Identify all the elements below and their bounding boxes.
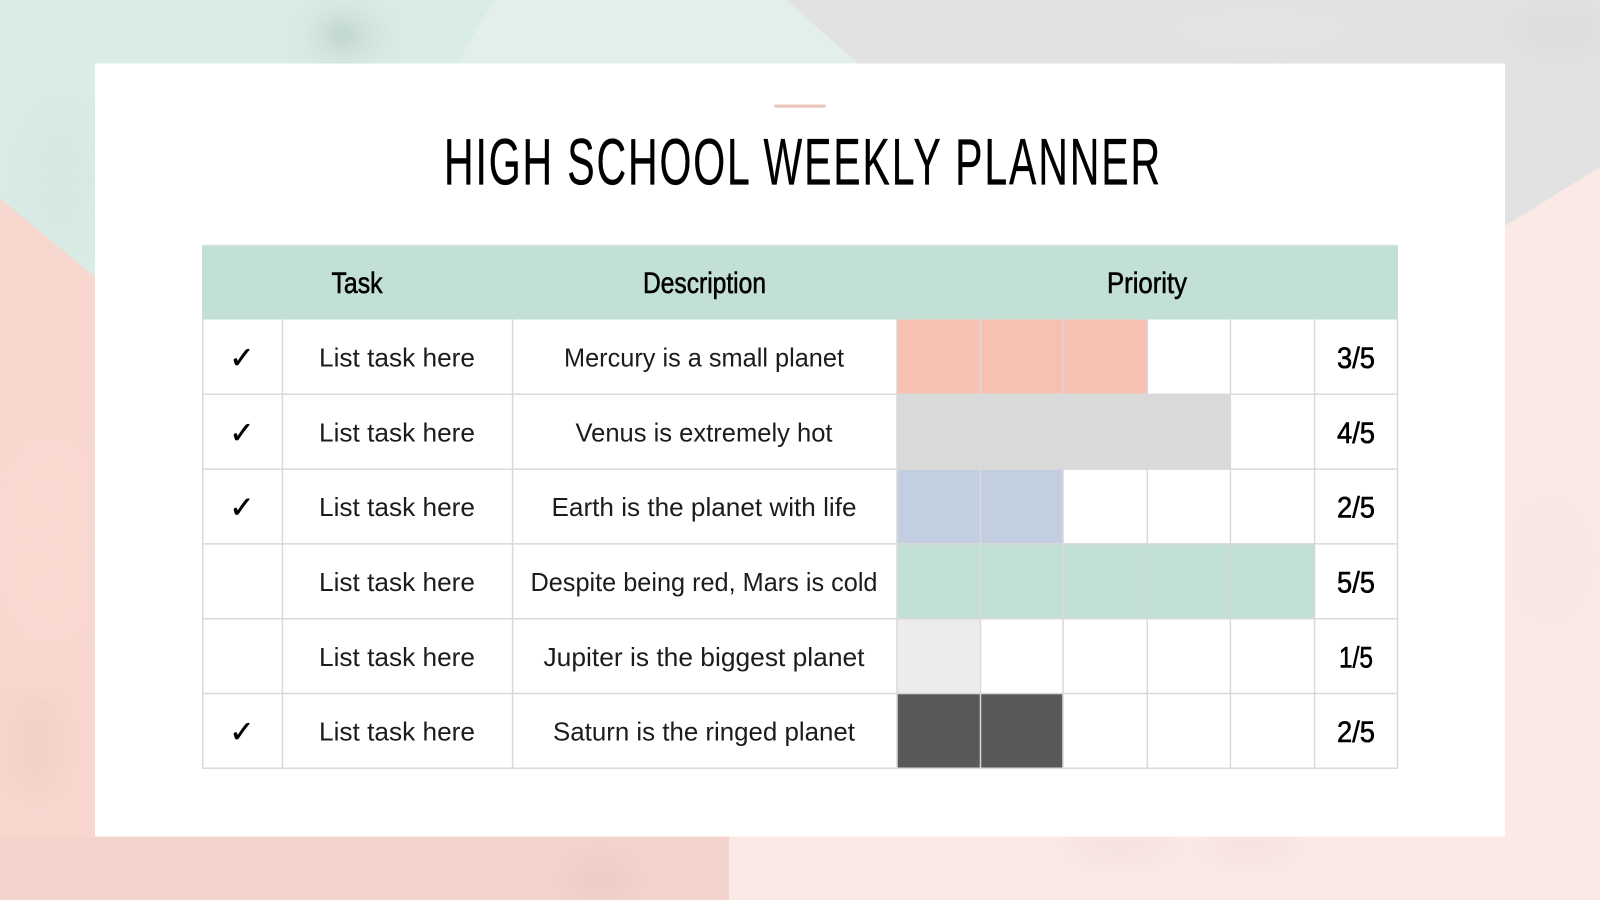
row 1: 3/5	[1337, 342, 1375, 375]
row 5	[319, 642, 1373, 674]
row 2: List task here	[319, 418, 475, 448]
row 5: List task here	[319, 642, 475, 672]
row 4: 5/5	[1337, 566, 1375, 600]
row 4	[319, 566, 1375, 600]
table header row: Description	[643, 267, 766, 300]
row 3: List task here	[319, 492, 475, 522]
row 1: List task here	[319, 342, 475, 372]
planner table	[202, 245, 1398, 768]
row 2	[229, 416, 1375, 451]
accent bar	[774, 104, 826, 108]
table header row: Priority	[1107, 267, 1187, 300]
row 2: ✓	[229, 416, 255, 451]
row 4: Despite being red, Mars is cold	[530, 567, 878, 597]
title: HIGH SCHOOL WEEKLY PLANNER	[444, 124, 1162, 198]
row 3	[229, 490, 1375, 526]
row 3: Earth is the planet with life	[552, 492, 856, 522]
row 2: Venus is extremely hot	[576, 418, 833, 448]
row 5: 1/5	[1339, 642, 1373, 674]
row 6: List task here	[319, 716, 475, 746]
table header row	[202, 245, 1398, 320]
grid lines	[202, 320, 1398, 768]
row 1: ✓	[229, 341, 255, 376]
row 6: 2/5	[1337, 716, 1375, 749]
row 1: Mercury is a small planet	[564, 342, 845, 372]
row 6: ✓	[229, 715, 255, 750]
row 3: ✓	[229, 490, 255, 526]
row 3: 2/5	[1337, 492, 1375, 524]
priority bar fills	[897, 320, 1315, 768]
row 6	[229, 715, 1375, 750]
row 1	[229, 341, 1375, 376]
panel: white card	[95, 64, 1505, 836]
row 5: Jupiter is the biggest planet	[544, 642, 865, 672]
row 2: 4/5	[1337, 417, 1375, 450]
row 6: Saturn is the ringed planet	[553, 716, 856, 746]
row 4: List task here	[319, 567, 475, 597]
table header row: Task	[332, 267, 383, 300]
